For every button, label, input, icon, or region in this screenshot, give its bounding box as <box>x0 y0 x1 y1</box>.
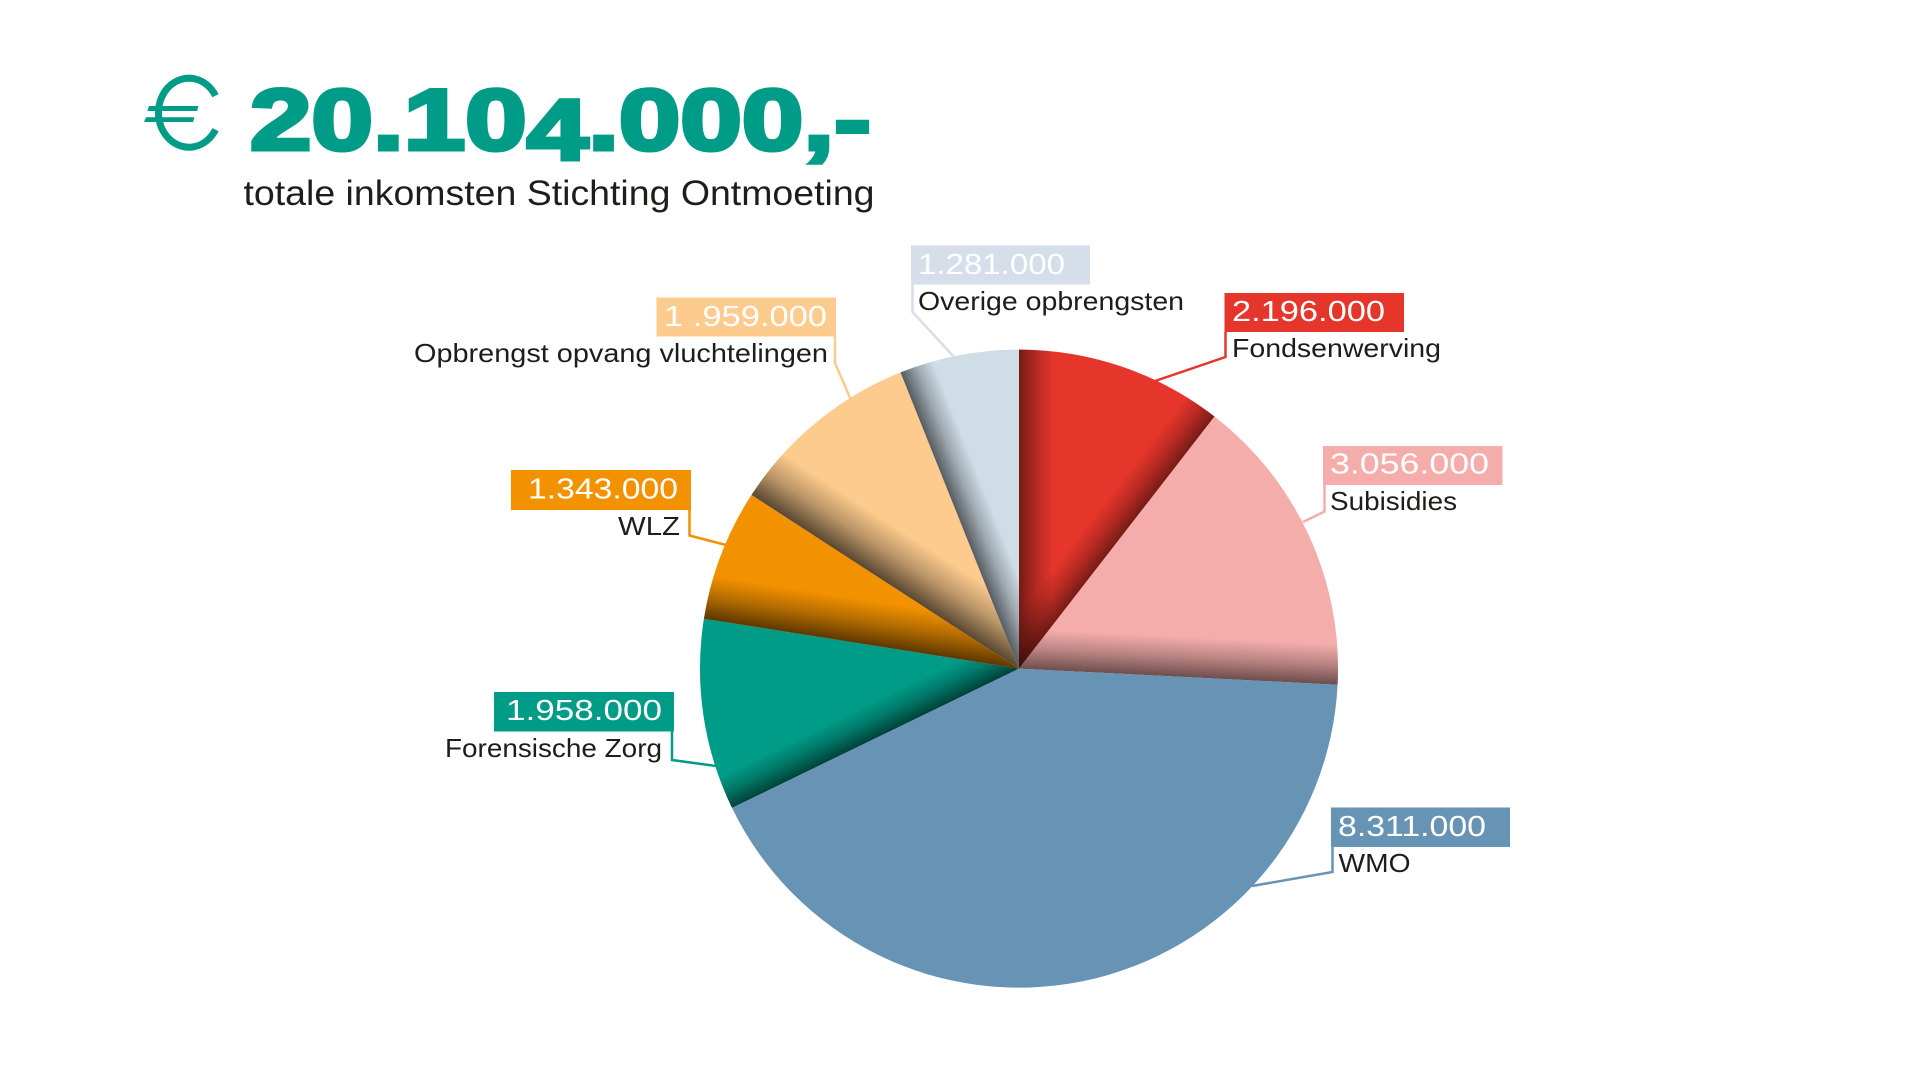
leader line: Overige opbrengsten <box>912 284 955 358</box>
slice: WMO <box>732 669 1338 988</box>
slice: Forensische Zorg <box>700 619 1019 808</box>
label: Subisidies: 3.056.000 <box>1330 448 1489 480</box>
label: Fondsenwerving <box>1224 293 1441 363</box>
label: WMO: 8.311.000 <box>1338 811 1486 843</box>
slice: Opbrengst opvang vluchtelingen <box>752 372 1019 669</box>
leader line: Fondsenwerving <box>1155 332 1226 381</box>
label: WMO <box>1331 808 1510 878</box>
subtitle: totale inkomsten Stichting Ontmoeting <box>244 174 874 213</box>
label: Opbrengst opvang vluchtelingen <box>414 298 836 368</box>
label: WLZ <box>511 470 691 541</box>
slice: Subisidies <box>1019 416 1338 685</box>
label: WLZ: 1.343.000 <box>528 474 678 506</box>
label: Opbrengst opvang vluchtelingen: 1 .959.000 <box>664 301 827 333</box>
label: Overige opbrengsten: Overige opbrengsten <box>918 286 1184 316</box>
label: Subisidies <box>1323 446 1502 516</box>
label: WLZ: WLZ <box>618 511 680 541</box>
label: Subisidies: Subisidies <box>1330 486 1457 516</box>
label: Fondsenwerving: Fondsenwerving <box>1232 333 1441 363</box>
label: Forensische Zorg: 1.958.000 <box>506 695 662 727</box>
leader line: Opbrengst opvang vluchtelingen <box>835 336 851 400</box>
slice: WLZ <box>704 495 1019 669</box>
label: Overige opbrengsten: 1.281.000 <box>918 249 1065 281</box>
title: total income amount: 4 <box>527 82 588 178</box>
label: Forensische Zorg <box>445 692 674 763</box>
label: Overige opbrengsten <box>911 246 1184 316</box>
label: WMO: WMO <box>1338 848 1410 878</box>
leader line: Forensische Zorg <box>672 731 716 766</box>
label: Opbrengst opvang vluchtelingen: Opbrengst opvang vluchtelingen <box>414 338 828 368</box>
slice: Overige opbrengsten <box>900 350 1019 669</box>
title: total income amount: 20.10 <box>250 72 465 168</box>
leader line: WMO <box>1252 847 1332 886</box>
title: total income amount: .000,- <box>588 72 871 168</box>
leader line: WLZ <box>690 510 726 545</box>
pie chart <box>700 350 1338 988</box>
label: Fondsenwerving: 2.196.000 <box>1232 296 1385 328</box>
slice: Fondsenwerving <box>1019 350 1214 669</box>
leader line: Subisidies <box>1303 485 1324 522</box>
label: Forensische Zorg: Forensische Zorg <box>445 733 662 763</box>
icon: euro sign <box>144 78 216 147</box>
